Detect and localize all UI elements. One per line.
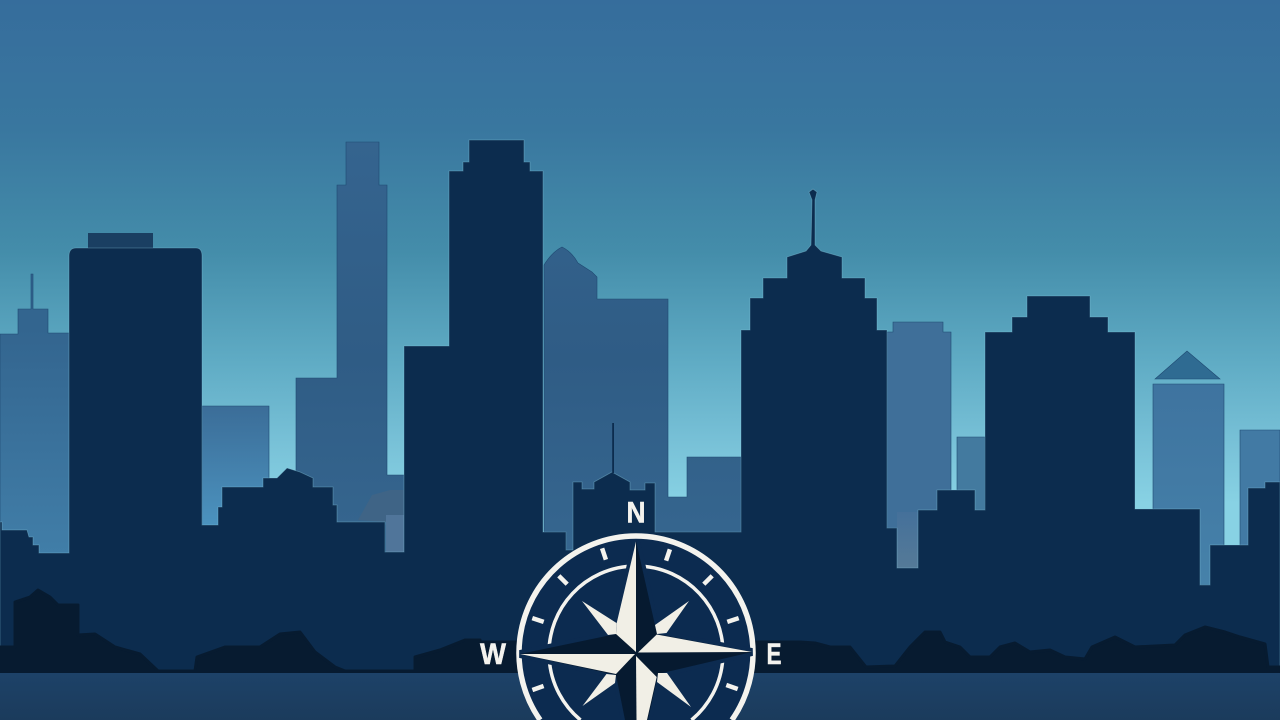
building: right edge block: [1240, 430, 1280, 550]
front layer of dark skyline: [0, 140, 1280, 680]
hazy grey block left: [358, 490, 405, 552]
back layer of skyline buildings: [0, 142, 1280, 585]
building: tall slim tower: [296, 142, 405, 555]
building: domed tower: [544, 247, 741, 552]
compass disc: [522, 640, 750, 720]
star ring gaps: [519, 564, 753, 665]
compass rose: [480, 496, 782, 720]
diagonal star points: [582, 601, 691, 707]
compass outer ring: [519, 536, 753, 720]
compass letter N: N: [626, 496, 646, 530]
roof cap on left tower: [88, 233, 153, 250]
compass letter E: E: [766, 638, 782, 671]
star dark shading: [520, 541, 752, 720]
building: pyramid roof tower: [1153, 384, 1224, 585]
building: small block right: [957, 437, 985, 515]
hazy grey block lower: [386, 515, 404, 552]
cardinal star points: [520, 542, 752, 720]
building: centre right tower: [887, 322, 951, 568]
hazy grey block right: [897, 512, 918, 568]
compass letter W: W: [480, 638, 507, 671]
compass tick marks: [532, 548, 739, 690]
spire on centre tower: [612, 423, 614, 473]
building: far left with spire: [0, 274, 70, 560]
water strip: [0, 673, 1280, 720]
building: low block left: [202, 406, 269, 530]
compass inner ring: [549, 566, 723, 720]
pyramid roof: [1155, 351, 1220, 379]
shoreline trees silhouette: [0, 590, 1280, 672]
